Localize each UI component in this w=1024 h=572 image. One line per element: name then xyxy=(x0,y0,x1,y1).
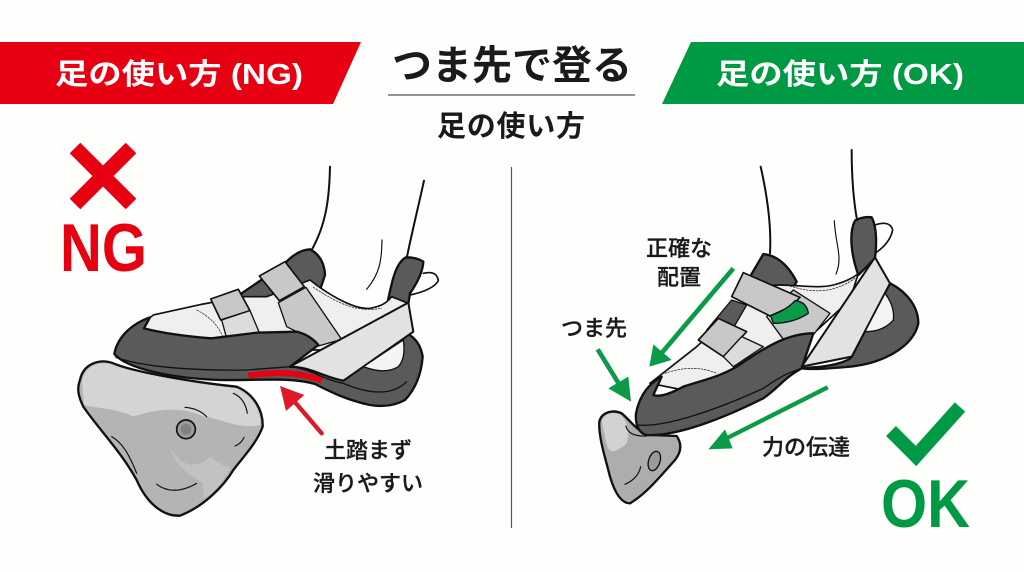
rock crack xyxy=(625,426,647,484)
green arrow: placement xyxy=(649,268,733,367)
heel band xyxy=(290,303,413,381)
label: force transfer: 力の伝達 xyxy=(762,435,850,460)
toe rand and sole xyxy=(114,317,423,406)
banner: NG: 足の使い方 (NG) xyxy=(55,58,303,91)
green arrow: toe xyxy=(598,349,631,402)
heel loop xyxy=(875,223,893,253)
label: accurate placement xyxy=(646,236,712,290)
rock cracks xyxy=(112,393,247,490)
heel tab xyxy=(851,217,876,275)
heel loop xyxy=(410,273,438,295)
illustration: OK shoe on rock xyxy=(598,150,918,503)
label: accurate placement: 配置 xyxy=(657,265,701,290)
strap: upper xyxy=(732,273,800,316)
tongue xyxy=(237,249,325,307)
leg lines xyxy=(761,150,857,274)
red sole highlight xyxy=(248,373,322,381)
banner: OK: 足の使い方 (OK) xyxy=(716,58,964,91)
heel window xyxy=(865,293,894,332)
rock xyxy=(599,411,680,503)
banner: NG xyxy=(0,42,361,104)
heel band xyxy=(802,257,890,367)
rock light area xyxy=(82,363,261,426)
heel rand xyxy=(802,283,918,369)
strap: lower xyxy=(698,318,747,357)
illustration: NG shoe on rock xyxy=(78,167,438,516)
leg lines xyxy=(312,167,424,289)
label: NG note xyxy=(313,438,423,496)
OK label: OK xyxy=(881,466,970,542)
strap: upper xyxy=(259,262,304,301)
rock light area xyxy=(602,413,628,451)
tongue xyxy=(750,254,797,293)
NG label: NG xyxy=(60,210,147,286)
title: つま先で登る xyxy=(392,44,632,88)
icon: green check xyxy=(891,407,960,456)
strap: lower xyxy=(211,289,250,320)
icon: red cross xyxy=(75,148,131,204)
label: accurate placement: 正確な xyxy=(646,236,712,261)
strap panel xyxy=(767,290,830,339)
upper xyxy=(130,280,408,350)
banner: OK xyxy=(662,42,1024,104)
subtitle: 足の使い方 xyxy=(437,110,585,143)
toe rand and sole xyxy=(636,333,813,435)
label: toe: つま先 xyxy=(561,316,627,341)
sole line xyxy=(637,367,817,425)
rock mottling xyxy=(170,447,230,498)
rock bolt xyxy=(646,450,663,472)
upper xyxy=(650,273,858,390)
heel tab xyxy=(387,257,423,304)
upper stitching xyxy=(197,287,382,338)
sole line xyxy=(116,357,407,392)
upper stitching xyxy=(665,278,855,373)
label: NG note: 滑りやすい xyxy=(313,471,423,496)
rock xyxy=(78,361,263,516)
rock bolt xyxy=(177,420,195,439)
dark gap between straps xyxy=(707,300,747,337)
red arrow xyxy=(280,386,322,433)
green strap tab xyxy=(771,301,808,323)
strap: instep panel xyxy=(278,287,342,346)
green arrow: force xyxy=(708,387,828,449)
heel window xyxy=(363,340,404,371)
label: NG note: 土踏まず xyxy=(324,438,412,463)
